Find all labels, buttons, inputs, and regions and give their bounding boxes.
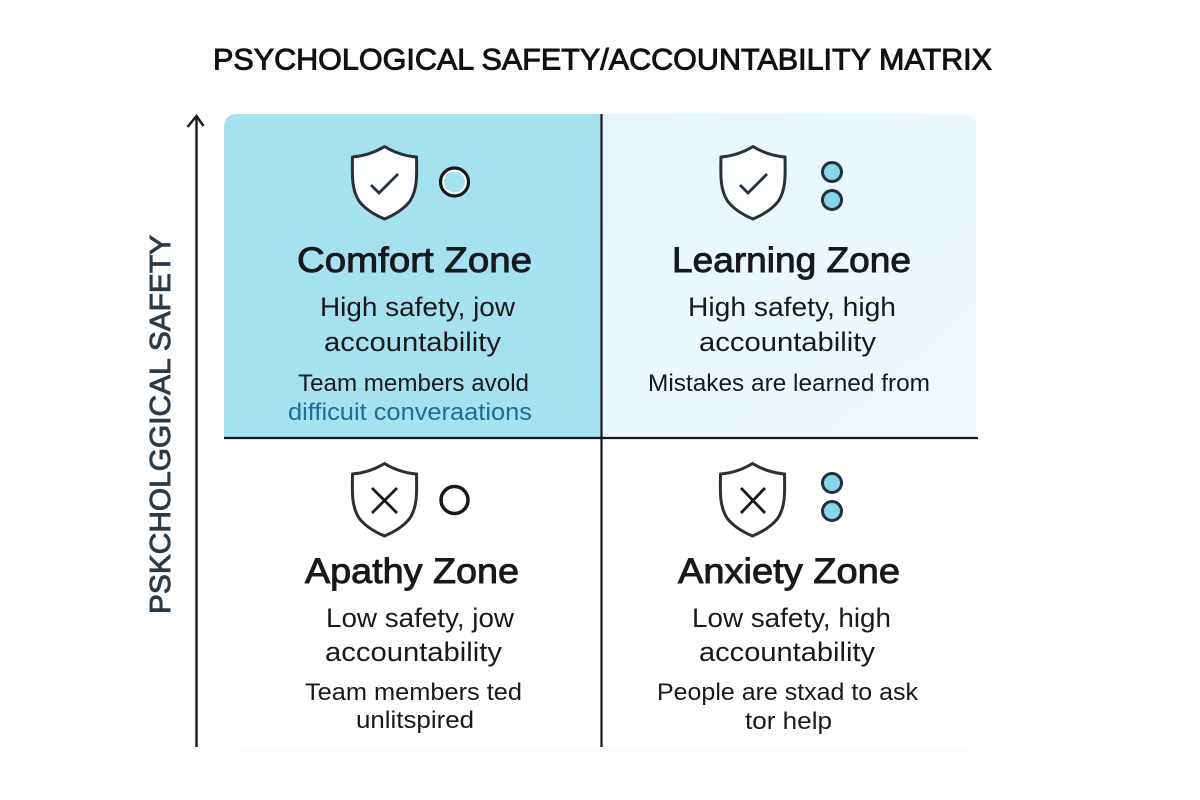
behaviour note: People are stxad to ask <box>657 679 919 706</box>
description <box>688 292 896 357</box>
description <box>320 292 516 357</box>
description: Low safety, jow <box>326 603 515 633</box>
behaviour note: tor help <box>745 708 832 735</box>
behaviour note <box>657 679 919 735</box>
behaviour note <box>305 679 522 734</box>
icon: shield with cross <box>720 464 785 536</box>
panel: comfort zone <box>224 114 601 438</box>
icon: low accountability circle <box>441 486 468 514</box>
heading: Apathy Zone <box>305 552 519 591</box>
icon: shield with cross <box>352 464 417 536</box>
icon: high accountability circles <box>822 162 842 210</box>
y axis label: PSKCHOLGGICAL SAFETY <box>145 235 177 614</box>
behaviour note: unlitspired <box>356 707 474 734</box>
behaviour note: Team members avold <box>298 370 529 397</box>
description: High safety, jow <box>320 292 516 322</box>
panel: anxiety zone <box>601 438 978 747</box>
behaviour note: difficuit converaations <box>288 399 532 426</box>
behaviour note <box>288 370 532 426</box>
description: High safety, high <box>688 292 896 322</box>
behaviour note: Mistakes are learned from <box>648 370 930 397</box>
description: accountability <box>699 327 877 357</box>
description <box>692 603 891 667</box>
description: Low safety, high <box>692 603 891 633</box>
heading: Learning Zone <box>672 241 911 280</box>
heading: Comfort Zone <box>297 241 532 280</box>
icon: shield with check <box>721 146 785 219</box>
y axis arrow <box>188 116 204 747</box>
heading: Anxiety Zone <box>678 552 900 591</box>
panel: apathy zone <box>224 438 601 747</box>
description <box>325 603 515 667</box>
icon: shield with check <box>352 146 417 219</box>
title: PSYCHOLOGICAL SAFETY/ACCOUNTABILITY MATRIX <box>213 44 992 76</box>
icon: low accountability circle <box>440 168 468 196</box>
description: accountability <box>325 637 503 667</box>
icon: high accountability circles <box>822 474 842 520</box>
behaviour note: Team members ted <box>305 679 522 706</box>
description: accountability <box>324 327 502 357</box>
description: accountability <box>699 637 876 667</box>
panel: learning zone <box>601 114 976 438</box>
